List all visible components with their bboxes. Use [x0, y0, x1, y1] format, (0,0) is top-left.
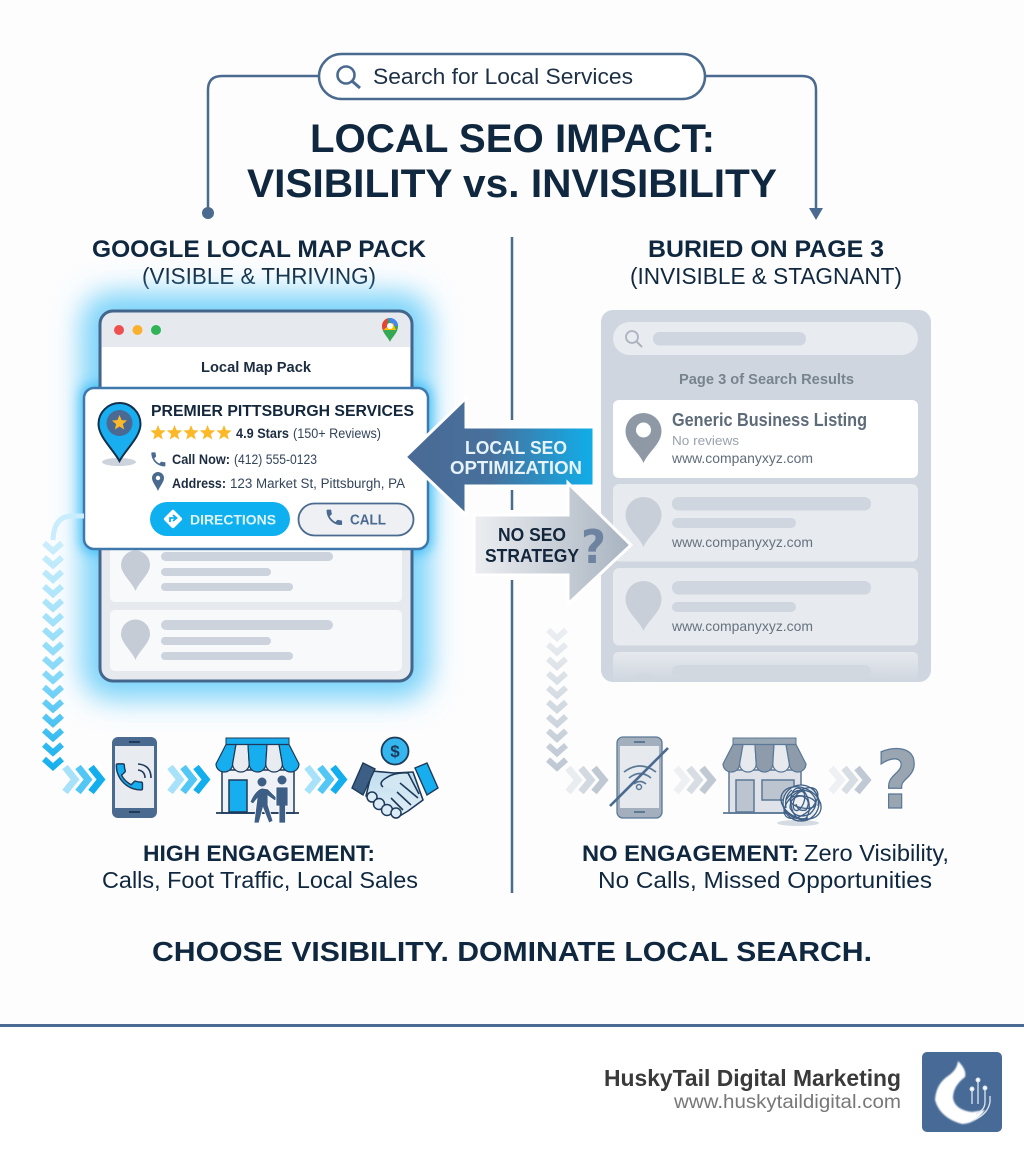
left heading: (VISIBLE & THRIVING) — [142, 263, 376, 289]
icon: handshake with dollar coin: $ — [390, 742, 400, 761]
call button: CALL — [350, 512, 386, 528]
title — [247, 117, 777, 206]
right caption: NO ENGAGEMENT: — [582, 841, 799, 866]
phone line: (412) 555-0123 — [234, 452, 317, 467]
panel: page 3 search results — [601, 310, 931, 682]
panel heading: Page 3 of Search Results — [679, 372, 854, 388]
panel: local map pack window — [80, 303, 432, 689]
directions button — [150, 502, 290, 536]
faded listing 2 — [613, 484, 918, 562]
arrow: no seo strategy: STRATEGY — [485, 546, 579, 566]
left caption: HIGH ENGAGEMENT: — [143, 841, 375, 866]
blue chevron flow down — [44, 516, 84, 767]
footer — [0, 1024, 1024, 1154]
right heading: (INVISIBLE & STAGNANT) — [630, 263, 902, 289]
left heading: GOOGLE LOCAL MAP PACK — [92, 236, 427, 263]
directions button: DIRECTIONS — [190, 512, 276, 528]
right caption: No Calls, Missed Opportunities — [598, 867, 932, 893]
left heading — [92, 236, 427, 289]
window dots — [114, 325, 161, 335]
faded listing 4 — [613, 652, 918, 682]
panel: featured business card — [84, 388, 428, 549]
gray chevron flow down — [548, 630, 566, 768]
blue chevrons to handshake — [307, 767, 343, 792]
gray chevrons to question mark — [831, 768, 867, 792]
arrow: no seo strategy: NO SEO — [498, 525, 566, 545]
right caption: Zero Visibility, — [804, 840, 949, 866]
phone line — [151, 452, 317, 467]
title: LOCAL SEO IMPACT: — [310, 117, 715, 161]
arrow: local seo optimization: OPTIMIZATION — [450, 458, 582, 478]
icon: blue location pin — [98, 403, 140, 466]
right heading: BURIED ON PAGE 3 — [648, 236, 884, 263]
logo — [922, 1052, 1002, 1132]
generic listing — [613, 400, 918, 478]
address line: Address: — [172, 476, 226, 491]
generic listing: Generic Business Listing — [672, 410, 867, 430]
faded listing 3 — [613, 568, 918, 646]
generic listing: www.companyxyz.com — [671, 450, 813, 466]
company website: www.huskytaildigital.com — [673, 1091, 901, 1113]
address line: 123 Market St, Pittsburgh, PA — [230, 476, 405, 491]
icon: phone with no signal — [610, 737, 668, 818]
icon: storefront with customers — [216, 738, 299, 823]
list item 2 — [110, 610, 402, 671]
arrow: local seo optimization: LOCAL SEO — [465, 438, 567, 458]
list item 1 — [110, 545, 402, 602]
star rating: (150+ Reviews) — [293, 426, 381, 441]
arrow: no seo strategy: ? — [581, 520, 606, 574]
window heading: Local Map Pack — [201, 360, 312, 376]
generic listing: No reviews — [672, 433, 740, 448]
call button — [298, 504, 414, 536]
left caption — [102, 841, 418, 893]
title: VISIBILITY vs. INVISIBILITY — [247, 162, 777, 206]
icon: empty storefront with tumbleweed — [723, 738, 826, 826]
center divider — [511, 237, 513, 893]
search bar with connectors — [202, 54, 823, 220]
faded listing 3: www.companyxyz.com — [671, 618, 813, 634]
company name: HuskyTail Digital Marketing — [604, 1065, 901, 1091]
faded listing 2: www.companyxyz.com — [671, 534, 813, 550]
star rating: 4.9 Stars — [236, 426, 289, 441]
arrow: local seo optimization — [405, 398, 594, 515]
icon: google maps pin — [382, 318, 398, 342]
faded search bar — [613, 322, 918, 355]
browser content area — [102, 347, 410, 392]
address line — [152, 472, 405, 491]
call to action: CHOOSE VISIBILITY. DOMINATE LOCAL SEARCH. — [152, 936, 872, 967]
right heading — [630, 236, 902, 289]
star rating — [150, 425, 381, 441]
blue chevrons to store — [170, 767, 206, 792]
right caption — [582, 840, 949, 893]
phone line: Call Now: — [172, 452, 230, 467]
left caption: Calls, Foot Traffic, Local Sales — [102, 867, 418, 893]
search bar with connectors: Search for Local Services — [373, 64, 633, 89]
blue chevrons to phone — [65, 767, 101, 792]
arrow: no seo strategy — [474, 483, 631, 604]
business name: PREMIER PITTSBURGH SERVICES — [151, 403, 414, 420]
icon: question mark: ? — [876, 734, 919, 827]
gray chevrons to phone — [568, 768, 604, 792]
gray chevrons to store — [676, 768, 712, 792]
icon: phone with call — [112, 737, 157, 818]
icon: handshake with dollar coin — [352, 738, 438, 818]
